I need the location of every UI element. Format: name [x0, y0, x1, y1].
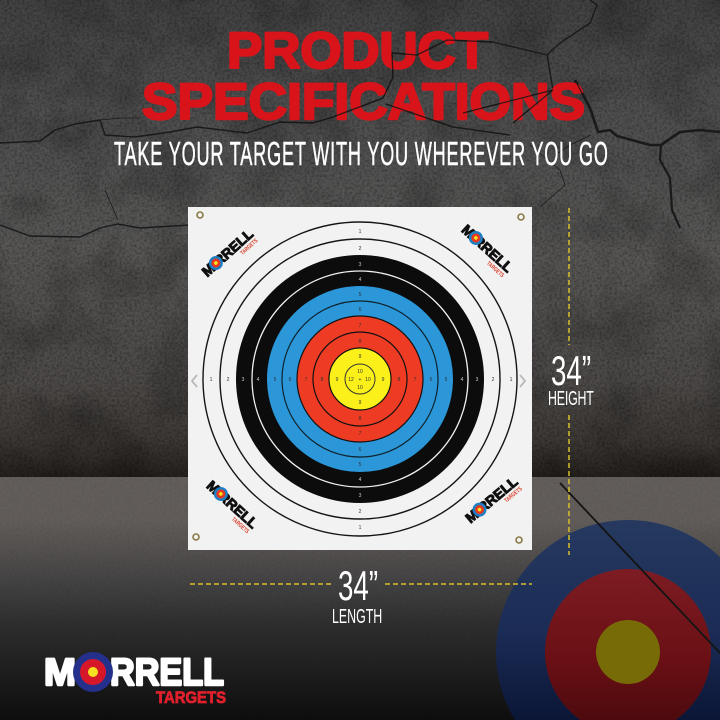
length label: [332, 562, 382, 628]
ring numbers: 9: [359, 400, 362, 406]
title: SPECIFICATIONS: [142, 73, 585, 130]
ring numbers: +: [359, 377, 362, 383]
ring numbers: 1: [210, 377, 213, 383]
title cracks overlay: [280, 40, 590, 127]
logo top right: M RRELL: [459, 221, 516, 276]
ring numbers: 6: [359, 307, 362, 313]
ring numbers: 2: [492, 377, 495, 383]
ring numbers: 4: [359, 277, 362, 283]
logo top right: TARGETS: [485, 261, 505, 279]
ring numbers: 7: [414, 377, 417, 383]
logo top left: TARGETS: [240, 238, 259, 257]
ring numbers: 7: [359, 431, 362, 437]
ring numbers: 6: [430, 377, 433, 383]
side chevrons: [192, 375, 525, 387]
height label: 34”: [551, 347, 591, 394]
ring numbers: 5: [445, 377, 448, 383]
height dimension line: [568, 208, 570, 555]
concentric rings: [203, 222, 517, 536]
ring numbers: 3: [242, 377, 245, 383]
ring numbers: [210, 229, 513, 531]
length label: LENGTH: [332, 605, 382, 628]
brand logo: [44, 652, 226, 707]
logo bottom left: M RRELL: [204, 477, 261, 532]
ring numbers: 3: [476, 377, 479, 383]
ring numbers: 4: [359, 477, 362, 483]
brand logo: TARGETS: [156, 688, 226, 707]
background: floor: [0, 477, 720, 720]
ring numbers: 5: [359, 292, 362, 298]
length dimension line: [190, 583, 532, 585]
ring numbers: 5: [359, 462, 362, 468]
ring numbers: 1: [359, 525, 362, 531]
height label: HEIGHT: [548, 387, 594, 410]
grommets: [193, 212, 524, 543]
length label: 34”: [338, 562, 378, 609]
decorative large target bottom right: [496, 483, 720, 720]
ring numbers: 4: [461, 377, 464, 383]
ring numbers: 8: [359, 339, 362, 345]
ring numbers: 2: [359, 246, 362, 252]
ring numbers: 1: [510, 377, 513, 383]
ring numbers: 9: [359, 354, 362, 360]
title: PRODUCT: [227, 22, 488, 79]
ring numbers: 10: [365, 377, 371, 383]
ring numbers: 8: [359, 416, 362, 422]
background: cracked concrete wall: [0, 0, 720, 477]
logo bottom right: M RRELL: [462, 473, 521, 526]
brand logo: M: [44, 652, 76, 694]
ring numbers: 6: [359, 447, 362, 453]
ring numbers: 2: [359, 509, 362, 515]
brand logo: RRELL: [110, 652, 224, 694]
subtitle: TAKE YOUR TARGET WITH YOU WHEREVER YOU GO: [114, 135, 608, 172]
logo bottom right: TARGETS: [504, 486, 524, 504]
ring numbers: 9: [382, 377, 385, 383]
ring numbers: 3: [359, 493, 362, 499]
logo bottom left: TARGETS: [230, 517, 250, 535]
ring numbers: 6: [289, 377, 292, 383]
logo top left: M RRELL: [199, 225, 256, 280]
ring numbers: 10: [357, 385, 363, 391]
ring numbers: 4: [257, 377, 260, 383]
paper target: [188, 207, 532, 550]
ring numbers: 8: [321, 377, 324, 383]
ring numbers: 7: [305, 377, 308, 383]
ring numbers: 1: [359, 229, 362, 235]
ring numbers: 5: [274, 377, 277, 383]
ring numbers: 2: [227, 377, 230, 383]
ring numbers: 7: [359, 323, 362, 329]
ring numbers: 8: [398, 377, 401, 383]
title: [142, 22, 585, 130]
height label: [548, 347, 594, 410]
ring numbers: 9: [336, 377, 339, 383]
arrow shaft: [560, 483, 720, 653]
ring numbers: 12: [348, 377, 354, 383]
target sheet: [188, 207, 532, 550]
ring numbers: 3: [359, 262, 362, 268]
ring numbers: 10: [357, 369, 363, 375]
